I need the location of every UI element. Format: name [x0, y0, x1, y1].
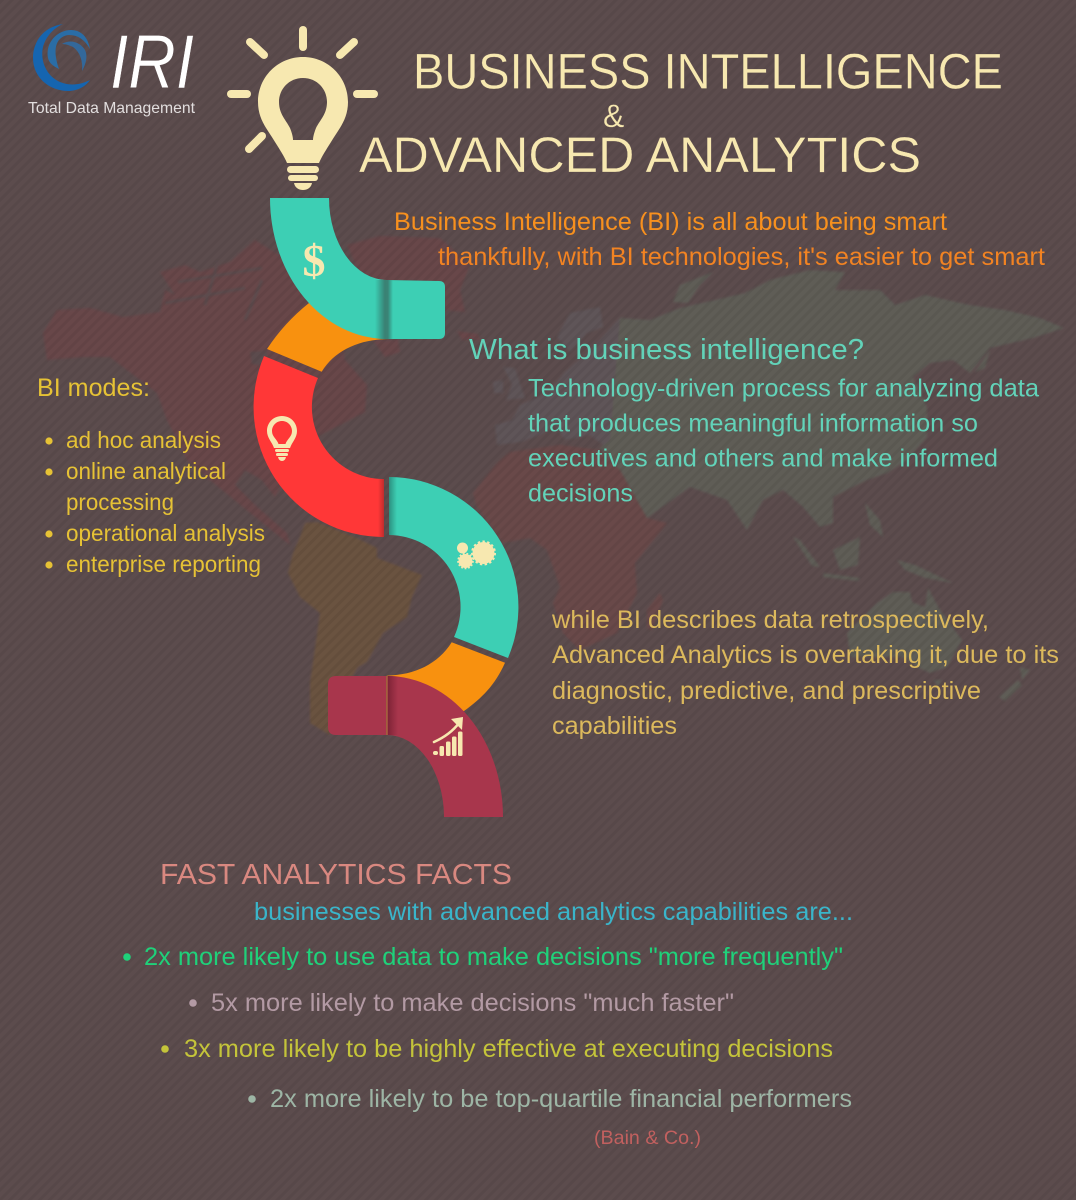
BI modes list: operational analysis [66, 520, 265, 546]
what is BI body: executives and others and make informed [528, 444, 998, 472]
title ampersand: & [603, 98, 624, 134]
map: Hudson Bay and Gulf gaps [250, 350, 268, 366]
facts heading: FAST ANALYTICS FACTS [160, 859, 512, 891]
advanced analytics text: diagnostic, predictive, and prescriptive [552, 677, 981, 705]
ribbon: teal middle segment [389, 477, 518, 658]
what is BI body: decisions [528, 480, 633, 508]
advanced analytics text: Advanced Analytics is overtaking it, due to its [552, 641, 1059, 669]
map: Australia and New Zealand [847, 588, 1030, 701]
fast analytics facts [123, 859, 853, 1149]
BI modes list: ad hoc analysis [66, 427, 221, 453]
logo wordmark: IRI [110, 20, 194, 105]
advanced analytics text: while BI describes data retrospectively, [551, 606, 989, 634]
logo: IRI [28, 20, 196, 117]
BI modes panel [37, 374, 265, 577]
ribbon: orange upper segment [267, 300, 390, 372]
logo swirl [33, 24, 90, 91]
BI modes list: online analytical [66, 458, 226, 484]
source credit: (Bain & Co.) [594, 1127, 701, 1149]
map: Arctic channels [165, 262, 262, 320]
title [359, 44, 1003, 183]
map: Africa [473, 445, 667, 650]
fact 4: 2x more likely to be top-quartile financial performers [270, 1085, 852, 1113]
advanced analytics text: capabilities [552, 712, 677, 740]
fact 1: 2x more likely to use data to make decisions "more frequently" [144, 943, 843, 971]
what is BI heading: What is business intelligence? [469, 334, 864, 366]
map: Asia [600, 270, 1064, 583]
ribbon: maroon bottom segment [328, 676, 503, 817]
what is BI body: Technology-driven process for analyzing data [528, 374, 1039, 402]
map: South America [288, 522, 422, 735]
ribbon: red segment [254, 356, 384, 537]
map: Europe [493, 307, 640, 450]
what is BI body: that produces meaningful information so [528, 410, 978, 438]
ribbon: orange lower segment [387, 642, 505, 720]
intro line 2: thankfully, with BI technologies, it's easier to get smart [438, 243, 1045, 271]
title line 1: BUSINESS INTELLIGENCE [413, 44, 1003, 100]
ribbon: teal top segment [270, 198, 445, 339]
map: North America [43, 240, 367, 545]
title line 2: ADVANCED ANALYTICS [359, 127, 921, 183]
BI modes list [45, 427, 265, 577]
fact 2: 5x more likely to make decisions "much faster" [211, 989, 734, 1017]
BI modes list: processing [66, 489, 174, 515]
icon: dollar sign: $ [302, 235, 326, 286]
map: Greenland and Iceland [347, 236, 480, 357]
intro line 1: Business Intelligence (BI) is all about being smart [394, 208, 947, 236]
intro text [394, 208, 1045, 271]
BI modes heading: BI modes: [37, 374, 150, 402]
world map background [43, 236, 1064, 735]
icon: small light bulb [267, 416, 297, 461]
logo tagline: Total Data Management [28, 100, 196, 117]
icon: gears [457, 542, 495, 568]
advanced analytics text [551, 606, 1059, 740]
facts subheading: businesses with advanced analytics capabilities are... [254, 898, 853, 926]
fact 3: 3x more likely to be highly effective at executing decisions [184, 1035, 833, 1063]
icon: large light bulb [231, 30, 374, 190]
BI modes list: enterprise reporting [66, 551, 261, 577]
what is BI body [528, 374, 1039, 508]
what is BI block [469, 334, 1039, 508]
S-curve ribbon [254, 198, 518, 817]
icon: growth chart [433, 717, 463, 756]
